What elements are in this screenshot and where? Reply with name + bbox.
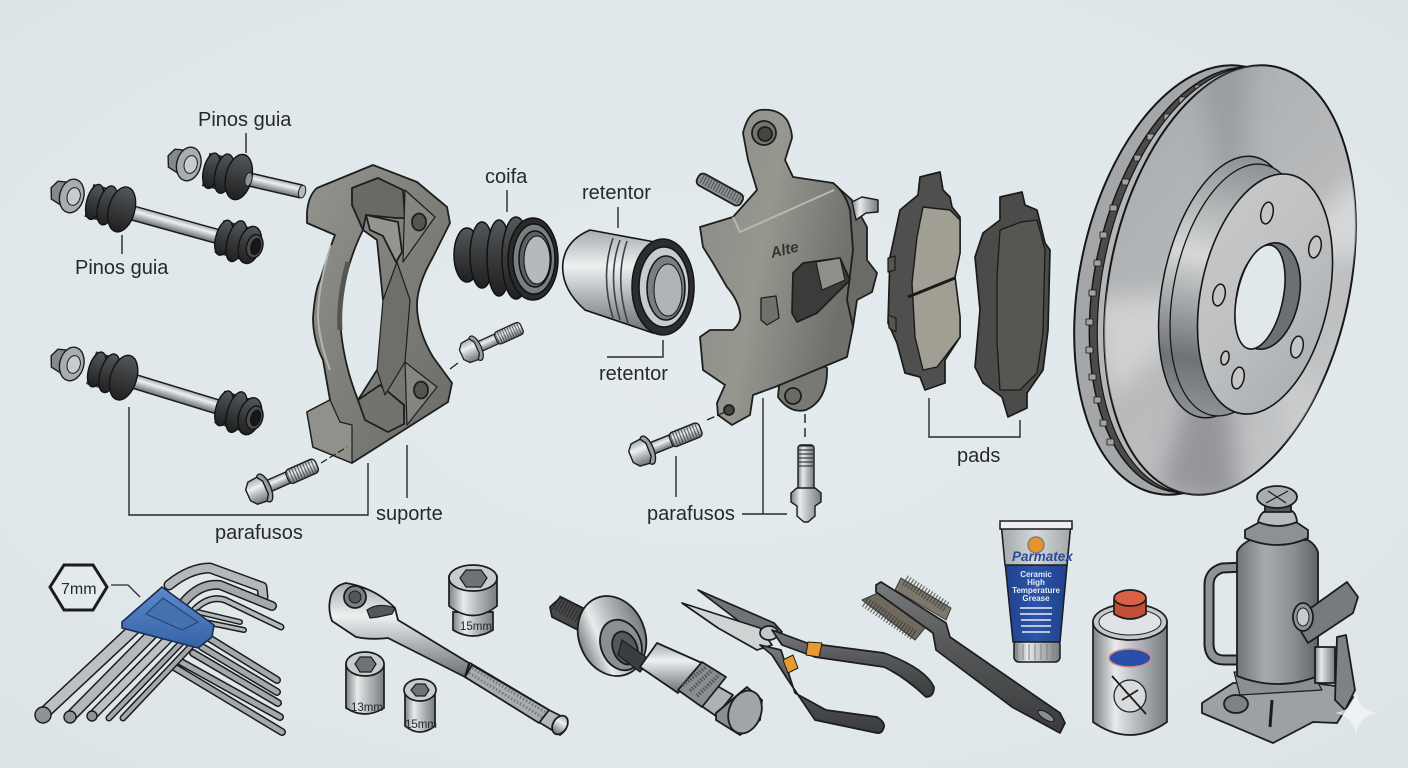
- product: grease tube: [1000, 521, 1073, 662]
- socket 15mm lower: 15mm: [405, 719, 437, 731]
- label: pads: [929, 398, 1020, 467]
- boot: [454, 217, 558, 300]
- rotor vents: [1086, 85, 1202, 445]
- label: retentor bottom: [599, 340, 668, 385]
- label: Pinos guia middle: Pinos guia: [75, 257, 169, 279]
- label: coifa: [485, 166, 528, 212]
- label: suporte: [376, 445, 443, 525]
- caliper body: [695, 110, 878, 425]
- stud: [791, 414, 821, 522]
- product: grease tube: Ceramic: [1020, 570, 1052, 579]
- tool: bottle jack: [1202, 486, 1358, 743]
- label: coifa: coifa: [485, 166, 528, 188]
- tool: wire brush: [862, 578, 1065, 733]
- piston: [563, 230, 694, 335]
- rotor bolt holes: [1211, 201, 1323, 390]
- product: grease tube: Parmatex: [1012, 549, 1073, 564]
- label: Pinos guia top: [198, 109, 292, 153]
- caliper bracket: [307, 165, 452, 463]
- brake pad right: [975, 192, 1050, 417]
- brand mark: Alte: [768, 239, 800, 262]
- label: parafusos right: parafusos: [647, 503, 735, 525]
- bolt lower caliper: [625, 412, 725, 471]
- label: pads: pads: [957, 445, 1000, 467]
- tool: ratchet: [329, 583, 571, 737]
- rotor hat: [1137, 144, 1317, 430]
- socket 13mm: 13mm: [351, 702, 383, 714]
- watermark sparkle: [1335, 692, 1377, 736]
- label: Pinos guia middle: [75, 235, 169, 279]
- label: parafusos right: [647, 398, 787, 525]
- socket 13mm: [346, 652, 384, 714]
- tool: press tool: [550, 586, 768, 738]
- bolt middle: [450, 315, 527, 369]
- caliper stud top: [695, 172, 745, 207]
- lower ear: [778, 360, 827, 411]
- product: grease tube: Grease: [1022, 594, 1050, 603]
- guide pin lower: [46, 342, 269, 442]
- bolt lower bracket: [242, 447, 347, 509]
- product: grease tube: High: [1027, 578, 1045, 587]
- bleed nipple: [852, 197, 878, 220]
- label: Pinos guia top: Pinos guia: [198, 109, 292, 131]
- socket 15mm lower: [404, 679, 437, 732]
- label: parafusos left: parafusos: [215, 522, 303, 544]
- label: suporte: suporte: [376, 503, 443, 525]
- label: retentor top: retentor: [582, 182, 651, 204]
- product: fluid can: [1093, 590, 1167, 735]
- tool: hex key set: [35, 565, 282, 732]
- product: grease tube: Temperature: [1012, 586, 1060, 595]
- label: retentor top: [582, 182, 651, 228]
- caliper back lobe: [800, 183, 877, 350]
- socket 15mm top: [449, 565, 497, 636]
- brake rotor: [1073, 64, 1357, 496]
- hex label 7mm: [50, 565, 140, 610]
- hex label 7mm: 7mm: [61, 581, 97, 598]
- socket 15mm top: 15mm: [460, 621, 492, 633]
- tool: pliers: [682, 590, 934, 733]
- brake pad left: [888, 172, 960, 390]
- label: retentor bottom: retentor: [599, 363, 668, 385]
- guide pin middle: [46, 174, 269, 271]
- caliper front: [700, 110, 853, 425]
- rotor inner ring: [1061, 43, 1385, 517]
- label: parafusos left: [129, 407, 368, 544]
- rotor face: [1067, 42, 1393, 518]
- guide pin top: [163, 142, 311, 215]
